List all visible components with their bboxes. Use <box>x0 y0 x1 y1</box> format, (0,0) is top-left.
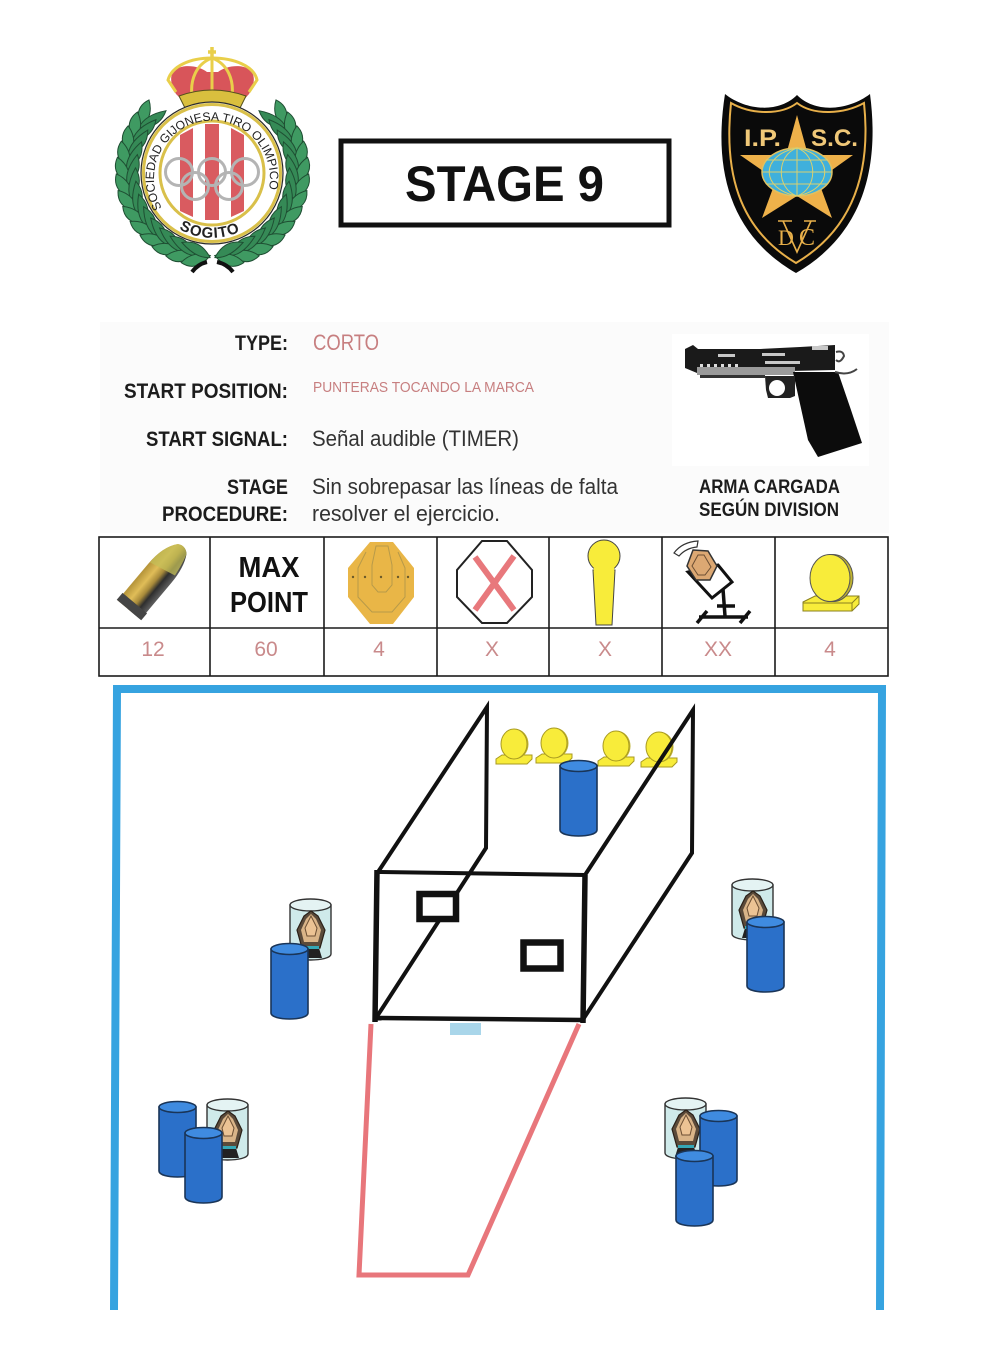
ring with lettering: SOGITO <box>180 221 238 238</box>
ring with lettering <box>140 101 284 245</box>
target counts: 4 <box>373 638 385 661</box>
IPSC shield logo <box>721 94 873 273</box>
caption: SEGÚN DIVISION <box>699 499 839 521</box>
icon: pistol <box>685 345 862 457</box>
icon: swinging target <box>674 541 750 623</box>
bay boundary <box>114 689 882 1310</box>
target counts <box>141 638 836 661</box>
caption <box>699 477 840 521</box>
info text rows <box>124 330 619 526</box>
caption: ARMA CARGADA <box>699 477 840 498</box>
start position: START POSITION: <box>124 380 288 403</box>
window left <box>420 894 456 919</box>
IPSC lettering: S.C. <box>811 125 858 152</box>
star <box>740 115 853 218</box>
center barrel <box>560 760 597 836</box>
IPSC lettering: I.P. <box>744 125 781 152</box>
max point label: MAX <box>238 552 300 584</box>
laurel wreath <box>114 97 311 272</box>
target group: lower right <box>665 1098 737 1226</box>
table grid <box>99 537 888 676</box>
pistol image panel <box>672 334 869 521</box>
icon: paper target <box>348 542 414 624</box>
type: CORTO <box>313 330 379 355</box>
target group: right mid <box>732 879 784 992</box>
start position <box>124 379 534 403</box>
info panel background <box>100 322 889 533</box>
stage procedure <box>162 474 619 526</box>
target count table <box>99 536 888 676</box>
stage procedure: PROCEDURE: <box>162 503 288 526</box>
crown <box>168 47 257 108</box>
stage procedure: Sin sobrepasar las líneas de falta <box>312 474 619 499</box>
target group: left mid <box>271 899 331 1019</box>
target counts: 12 <box>141 638 165 661</box>
red stripes and olympic rings <box>166 124 258 220</box>
icon: metal plate <box>803 554 859 611</box>
steel plates row <box>496 728 677 767</box>
start signal: START SIGNAL: <box>146 428 288 451</box>
start signal <box>146 426 519 451</box>
globe <box>762 148 832 196</box>
DVC monogram: C <box>799 225 815 251</box>
target counts: 4 <box>824 638 836 661</box>
ring with lettering: SOCIEDAD GIJONESA TIRO OLIMPICO <box>146 112 278 210</box>
type <box>235 330 379 355</box>
stage procedure: STAGE <box>227 476 288 499</box>
start position: PUNTERAS TOCANDO LA MARCA <box>313 379 534 396</box>
type: TYPE: <box>235 332 288 355</box>
icon: popper <box>588 540 620 625</box>
stage diagram <box>114 689 882 1310</box>
target counts: X <box>485 638 499 661</box>
target counts: XX <box>704 638 732 661</box>
fault line <box>359 1024 579 1275</box>
max point label: POINT <box>230 587 308 619</box>
title box: STAGE 9 <box>405 156 604 212</box>
icon: no-shoot target <box>457 541 532 623</box>
stage procedure: resolver el ejercicio. <box>312 501 500 526</box>
target counts: 60 <box>254 638 278 661</box>
window right <box>524 942 560 968</box>
max point label <box>230 552 308 619</box>
start signal: Señal audible (TIMER) <box>312 426 519 451</box>
IPSC lettering <box>744 125 858 152</box>
target counts: X <box>598 638 612 661</box>
crest: Sociedad Gijonesa Tiro Olimpico <box>114 47 310 274</box>
title box <box>341 141 669 225</box>
target group: lower left <box>159 1099 248 1203</box>
shooting box wireframe <box>375 707 693 1023</box>
start mark <box>450 1023 481 1035</box>
icon: bullet <box>117 536 195 620</box>
DVC monogram <box>778 221 816 252</box>
DVC monogram: D <box>778 225 794 250</box>
